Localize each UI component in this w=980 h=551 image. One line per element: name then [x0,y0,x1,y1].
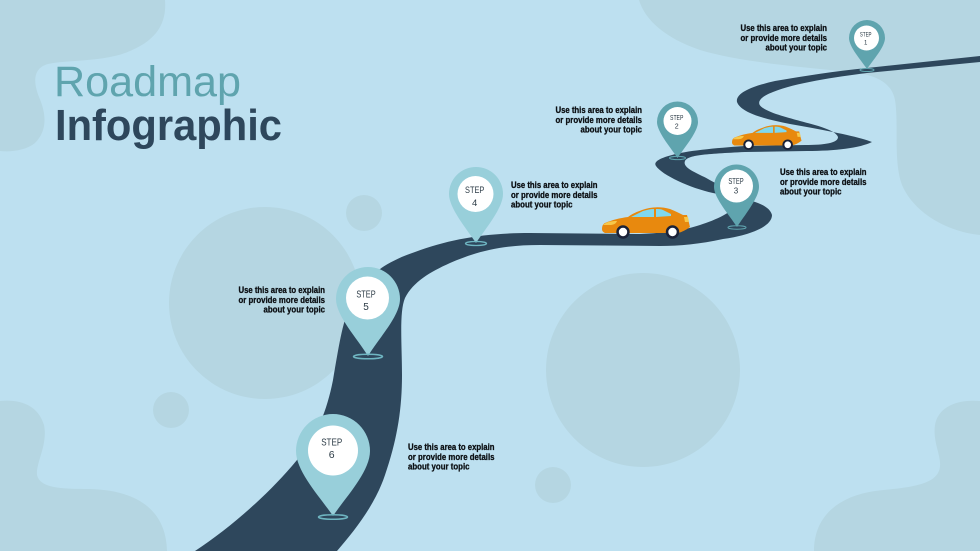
pin: step 6 [296,414,370,519]
pin: step 5: STEP [356,290,376,301]
pin: step 5 [336,267,400,359]
text: step 4: Use this area to explain [511,180,598,190]
text: step 1: about your topic [766,42,827,52]
text: step 5: or provide more details [238,295,325,305]
circle: large right [546,273,740,467]
pin: step 6: 6 [329,449,335,461]
pin: step 4: 4 [472,198,477,209]
text: step 5 [238,285,325,314]
title: Roadmap [54,58,241,106]
text: step 6: or provide more details [408,452,495,462]
text: step 4: about your topic [511,200,573,210]
circle: large left [169,207,361,399]
text: step 4: or provide more details [511,190,598,200]
road [195,56,980,551]
circle: small left [153,392,189,428]
pin: step 2: STEP [670,115,684,122]
text: step 2: Use this area to explain [556,105,642,115]
text: step 3: or provide more details [780,177,867,187]
text: step 6: about your topic [408,462,470,472]
text: step 3: Use this area to explain [780,167,866,177]
pin: step 4: STEP [465,185,484,196]
text: step 6: Use this area to explain [408,442,494,452]
pin: step 5: 5 [363,302,369,313]
text: step 1 [740,23,827,52]
pin: step 1: 1 [864,41,868,47]
pin: step 1: STEP [860,33,872,39]
title [54,58,282,150]
blob: bottom left [0,401,167,551]
circle: small bottom [535,467,571,503]
pin: step 2 [657,101,698,160]
pin: step 3: 3 [734,186,739,196]
text: step 1: Use this area to explain [740,23,827,33]
car: small [732,125,802,150]
pin: step 1 [849,20,885,72]
pin: step 4 [449,167,503,246]
text: step 2 [556,105,642,134]
blob: top left [0,0,165,151]
text: step 1: or provide more details [740,33,827,43]
circle: small top [346,195,382,231]
pin: step 2: 2 [675,124,679,131]
text: step 4 [511,180,598,210]
pin: step 6: STEP [321,437,342,449]
text: step 3 [780,167,867,196]
pin: step 3 [714,164,759,229]
text: step 6 [408,442,495,472]
text: step 5: about your topic [264,304,325,314]
car: large [602,207,690,239]
text: step 2: or provide more details [556,115,642,125]
pin: step 3: STEP [728,177,744,186]
blob: top right [639,0,980,235]
title: Infographic [55,101,282,150]
text: step 2: about your topic [580,124,642,134]
text: step 5: Use this area to explain [238,285,325,295]
text: step 3: about your topic [780,186,842,196]
blob: bottom right [814,401,980,551]
